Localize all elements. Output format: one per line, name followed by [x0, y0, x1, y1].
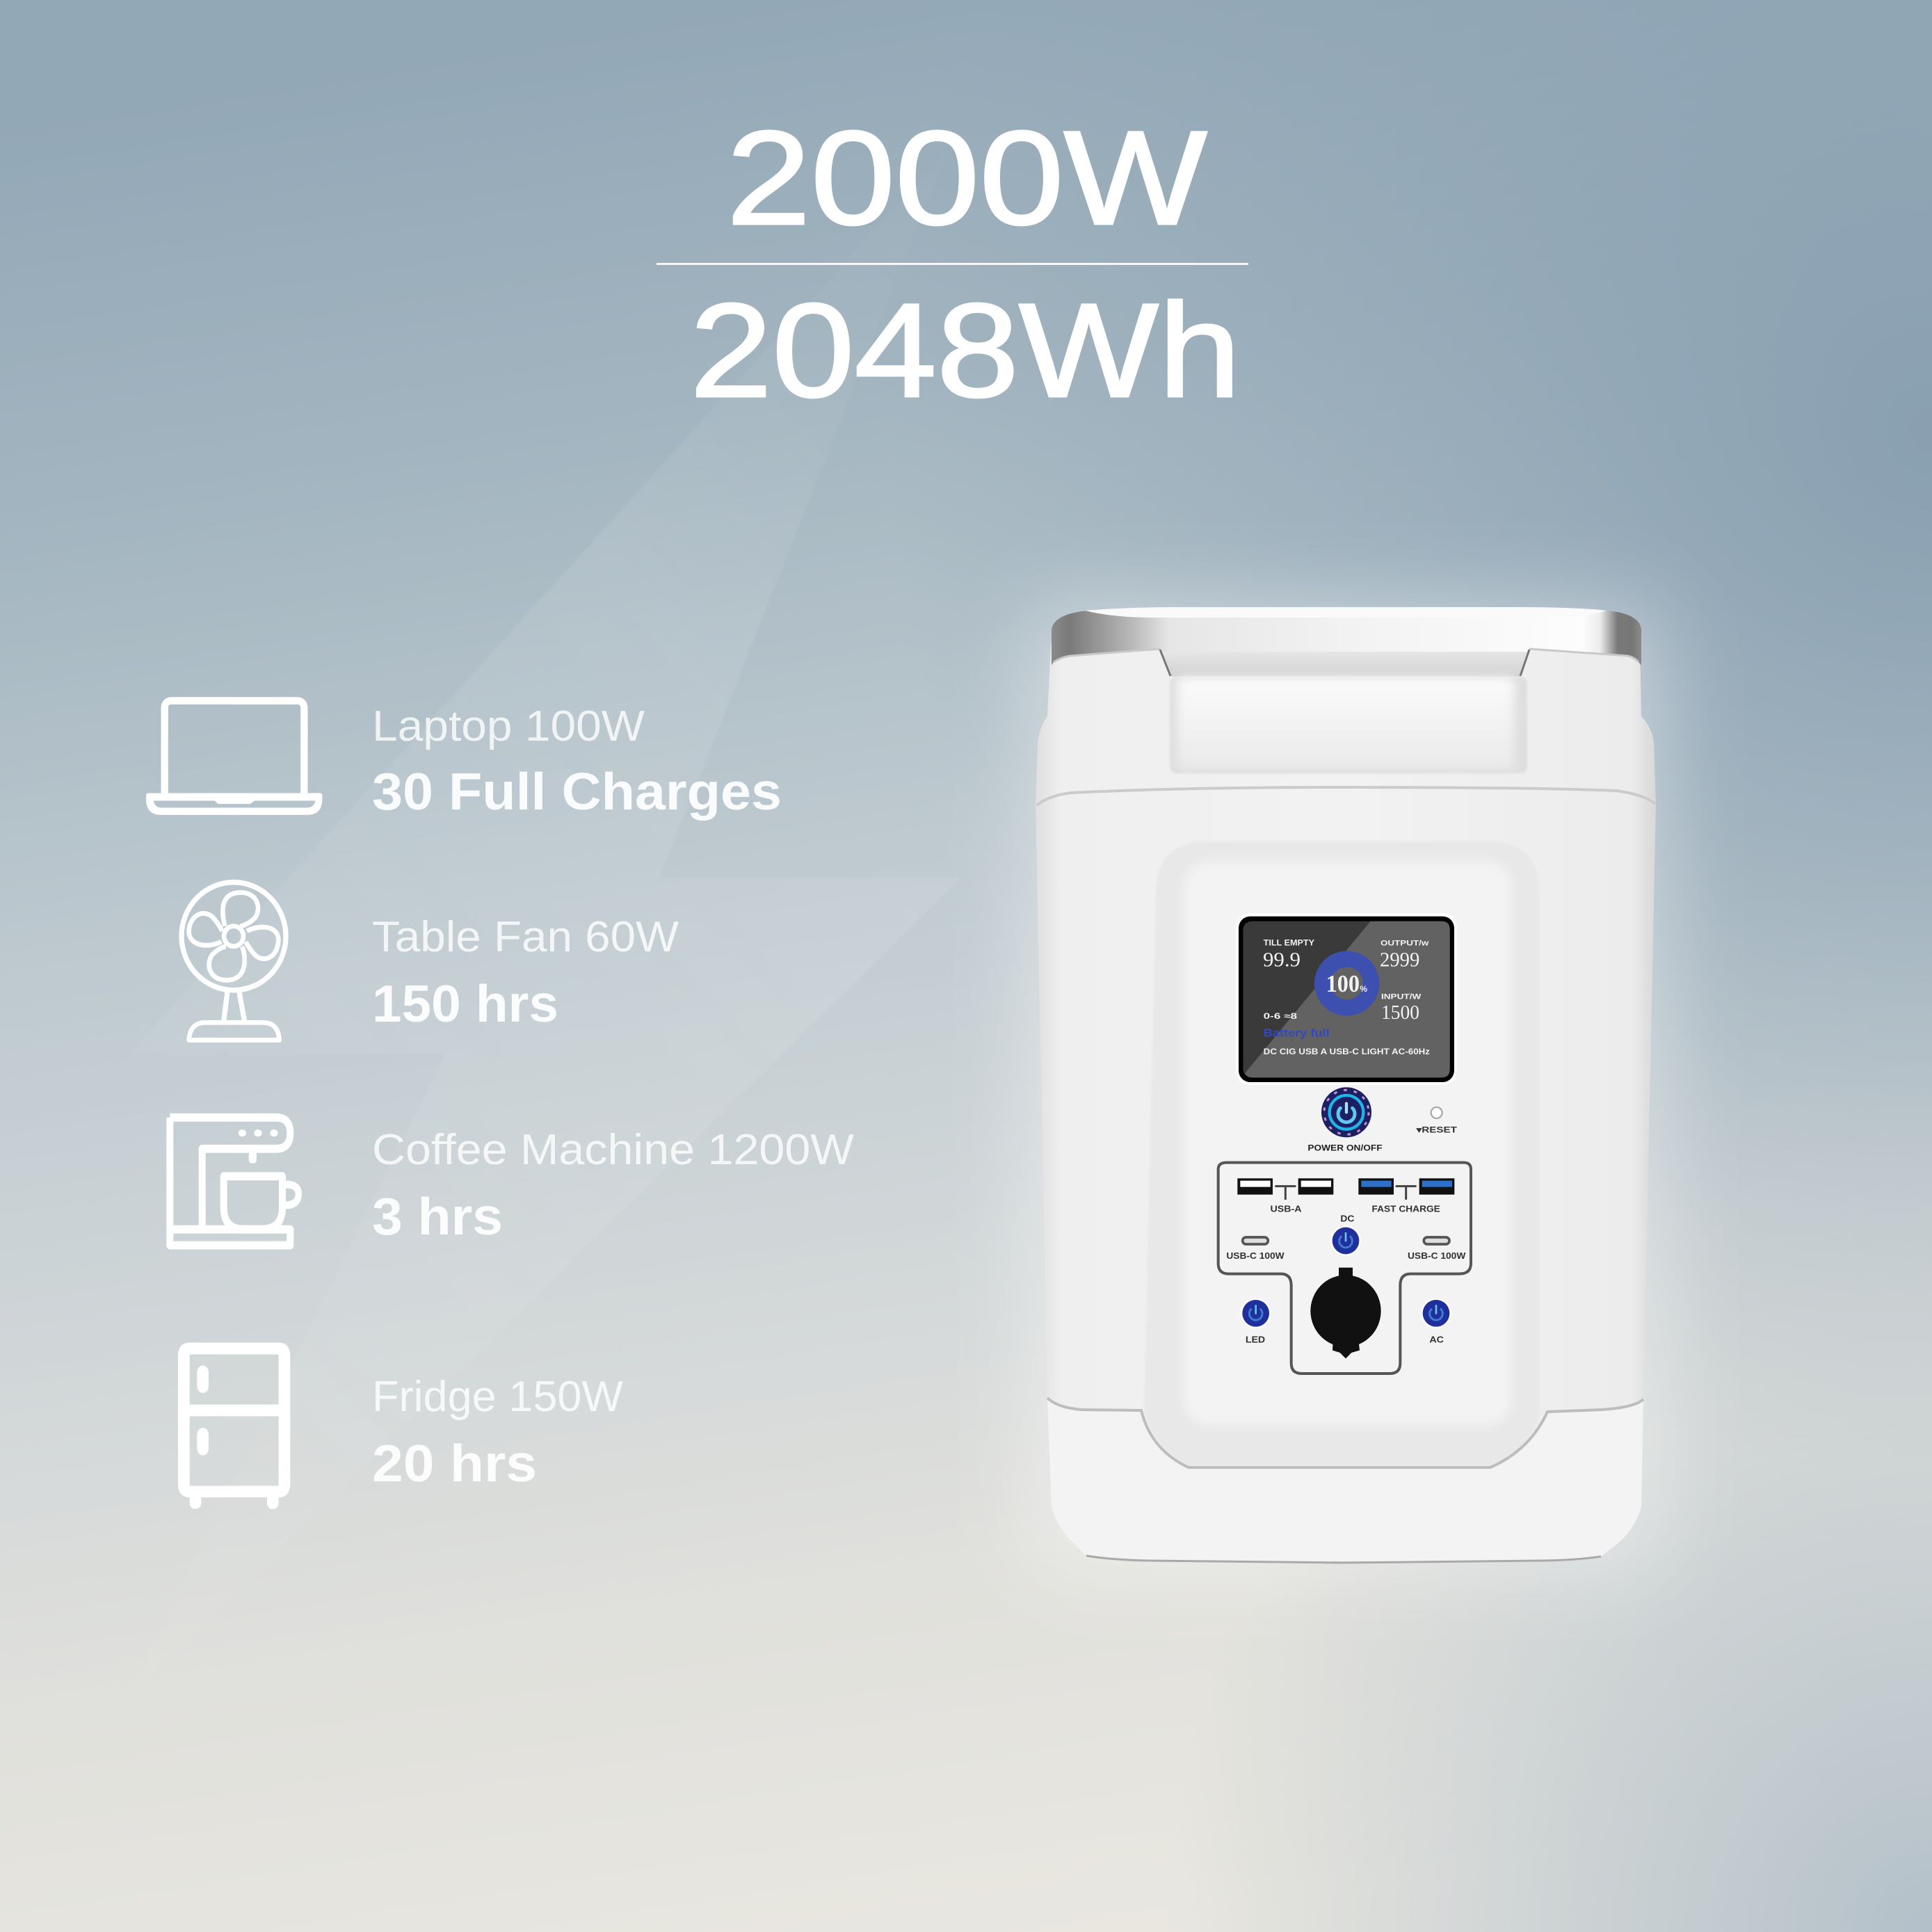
- text: table fan: Table Fan 60W: [372, 913, 679, 961]
- divider line: [657, 263, 1248, 265]
- screen readouts: %: [1360, 984, 1367, 994]
- screen readouts: TILL EMPTY: [1264, 937, 1314, 947]
- screen bezel: [1239, 917, 1454, 1082]
- port labels: USB-C 100W: [1226, 1251, 1285, 1261]
- screen readouts: 2999: [1380, 948, 1419, 971]
- text: fridge: Fridge 150W: [372, 1373, 623, 1421]
- groove lower: [1047, 1398, 1643, 1467]
- control panel surround: [1144, 842, 1540, 1466]
- screen light area: [1245, 921, 1450, 1077]
- port labels: AC: [1429, 1335, 1444, 1345]
- fast charge ports: [1358, 1178, 1454, 1200]
- title: battery capacity: 2048Wh: [690, 275, 1241, 425]
- screen readouts: Battery full: [1264, 1028, 1330, 1040]
- power buttons: [1241, 1225, 1451, 1328]
- lower base panel: [1047, 1398, 1643, 1563]
- usb-c ports: [1243, 1237, 1449, 1244]
- text: coffee machine: 3 hrs: [372, 1187, 503, 1246]
- text: fridge: 20 hrs: [372, 1434, 537, 1492]
- cap top highlight: [1085, 607, 1607, 618]
- text: fridge: [372, 1373, 623, 1492]
- screen dark area: [1243, 921, 1450, 1077]
- title: output power: 2000W: [726, 103, 1207, 252]
- port labels: [1226, 1205, 1465, 1345]
- reset button: [1431, 1107, 1442, 1118]
- power station: [1036, 607, 1656, 1563]
- cap lower edge: [1054, 649, 1639, 662]
- battery ring: [1323, 959, 1371, 1008]
- bottom edge: [1086, 1556, 1601, 1563]
- icon: fridge: [178, 1343, 290, 1509]
- icon: coffee machine: [170, 1118, 298, 1246]
- body shell: [1036, 643, 1656, 1563]
- screen readouts: 0-6 ≈8: [1264, 1011, 1297, 1021]
- groove upper: [1037, 787, 1655, 805]
- port panel: [1218, 1163, 1471, 1374]
- dc socket: [1310, 1268, 1382, 1358]
- text: table fan: [372, 913, 679, 1033]
- screen readouts: DC CIG USB A USB-C LIGHT AC-60Hz: [1264, 1047, 1430, 1056]
- screen readouts: OUTPUT/w: [1380, 939, 1429, 947]
- screen readouts: INPUT/W: [1381, 993, 1422, 1001]
- reset label: ▾RESET: [1415, 1125, 1458, 1134]
- text: table fan: 150 hrs: [372, 974, 558, 1033]
- text: laptop: [372, 702, 782, 821]
- text: laptop: 30 Full Charges: [372, 762, 782, 821]
- text: coffee machine: Coffee Machine 1200W: [372, 1126, 855, 1174]
- screen halo: [1236, 913, 1457, 1085]
- screen: [1236, 913, 1458, 1152]
- text: laptop: Laptop 100W: [372, 702, 645, 750]
- power label: POWER ON/OFF: [1307, 1143, 1383, 1152]
- screen readouts: 1500: [1381, 1001, 1419, 1024]
- usb-a ports: [1237, 1178, 1333, 1200]
- control panel face: [1184, 861, 1512, 1426]
- port labels: FAST CHARGE: [1371, 1205, 1440, 1214]
- top cap with silver ends: [1052, 607, 1641, 675]
- port labels: DC: [1340, 1214, 1354, 1224]
- screen readouts: 100: [1326, 971, 1360, 997]
- port labels: USB-C 100W: [1408, 1251, 1465, 1261]
- power on/off button: [1321, 1087, 1371, 1137]
- icon: table fan: [182, 883, 286, 1040]
- text: coffee machine: [372, 1126, 855, 1246]
- screen readouts: [1263, 937, 1430, 1056]
- handle bar: [1160, 652, 1529, 677]
- handle recess: [1170, 677, 1527, 773]
- port outline: [1218, 1163, 1471, 1374]
- port labels: USB-A: [1270, 1205, 1301, 1214]
- icon: laptop: [146, 701, 322, 815]
- product glow: [1022, 598, 1669, 1575]
- handle notch lines: [1160, 650, 1529, 676]
- port labels: LED: [1246, 1335, 1265, 1345]
- screen readouts: 99.9: [1263, 948, 1301, 971]
